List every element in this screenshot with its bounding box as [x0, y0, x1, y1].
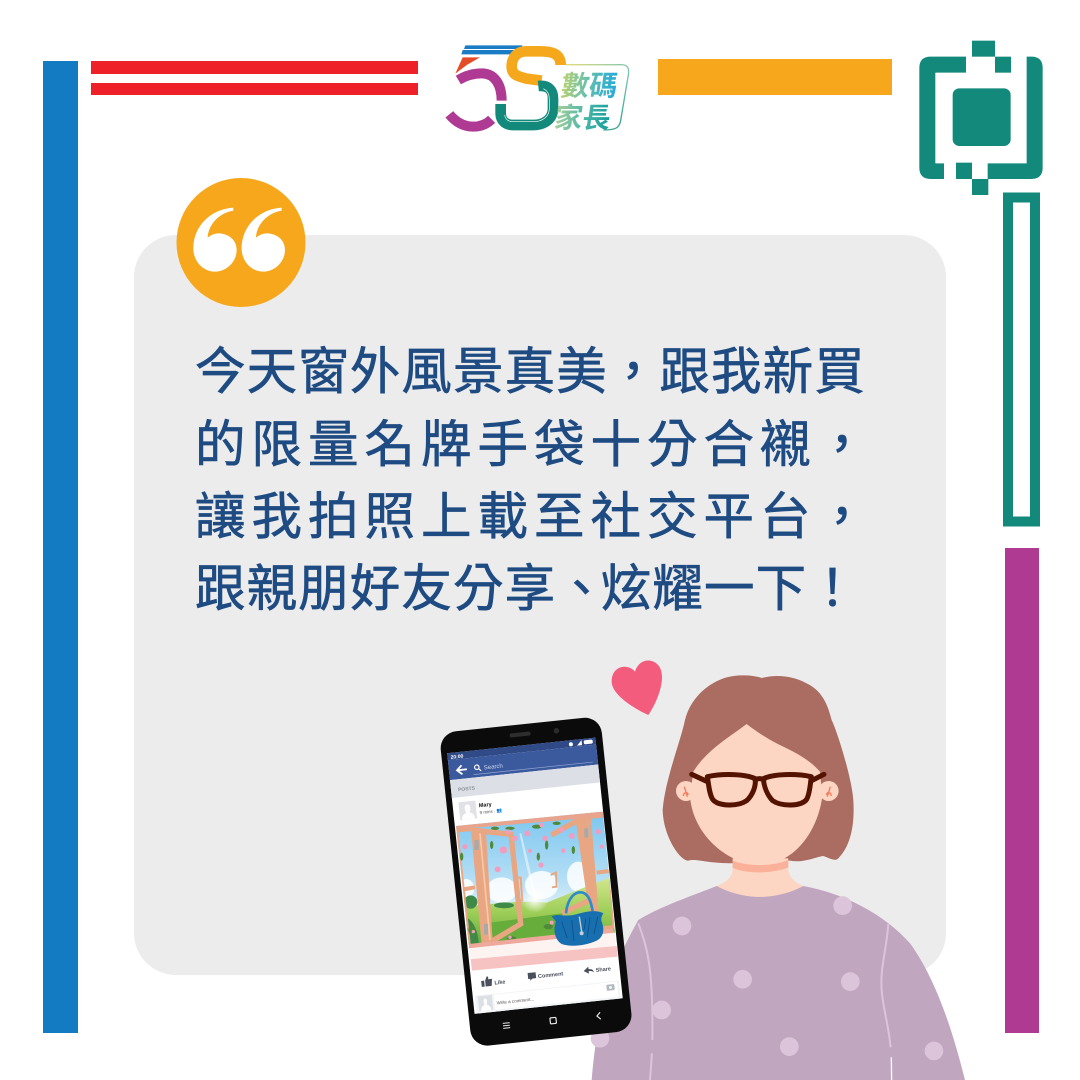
right green outlined bar [1008, 198, 1035, 522]
comment button [528, 969, 564, 981]
share button [583, 964, 611, 975]
logo: 55 digital parents: 家長 [552, 102, 613, 133]
tree line [464, 895, 514, 948]
bag clasp [579, 917, 582, 932]
quote text: 的限量名牌手袋十分合襯， [195, 416, 873, 473]
hills [464, 878, 615, 948]
nav menu [503, 1023, 510, 1028]
sleeve seams [638, 923, 891, 1080]
ears [676, 781, 839, 801]
comment box [475, 981, 621, 1014]
sweater [592, 886, 965, 1080]
neck shadow [733, 860, 788, 872]
glasses [692, 774, 824, 805]
handbag [552, 892, 603, 946]
quote text [195, 343, 873, 617]
status time: 20:00 [450, 754, 464, 761]
ear marks [683, 787, 831, 797]
sleeve gap [889, 1057, 894, 1080]
nav home [550, 1017, 556, 1024]
hair [663, 675, 854, 863]
logo: 55 digital parents [449, 45, 629, 133]
person: woman with glasses [591, 675, 965, 1080]
right post [580, 818, 596, 912]
icon: orange quote badge [176, 178, 306, 307]
top lintel [456, 811, 603, 829]
share button: Share [595, 966, 611, 974]
left blue bar [43, 61, 78, 1033]
right fixed window [589, 815, 614, 928]
left fixed window [457, 829, 483, 947]
quote text: 讓我拍照上載至社交平台， [195, 488, 873, 545]
top red double bars [91, 61, 418, 95]
comment input [494, 982, 619, 1010]
light ray [519, 833, 531, 876]
quote text: 跟親朋好友分享、炫耀一下！ [195, 560, 859, 617]
right open sash [551, 820, 590, 913]
sweater dots [591, 896, 943, 1060]
like button: Like [494, 979, 506, 987]
blossoms [462, 823, 604, 939]
clouds [458, 862, 590, 903]
phone [439, 716, 633, 1047]
search icon [474, 765, 481, 771]
window sill top [467, 928, 614, 949]
icon: pink heart [612, 661, 662, 715]
post name: Mary [479, 802, 493, 809]
quote text: 今天窗外風景真美，跟我新買 [195, 343, 866, 400]
pink ledge [471, 946, 618, 971]
photo: window scene with handbag [453, 810, 620, 971]
search underline [474, 762, 593, 775]
foreground meadow [492, 914, 563, 938]
bag body [552, 911, 603, 946]
left open sash [483, 831, 521, 942]
status icons [569, 739, 593, 746]
search label: Search [484, 764, 503, 771]
phone body [439, 716, 633, 1047]
top orange bar [658, 59, 892, 95]
neck [716, 858, 805, 903]
posts strip [450, 765, 600, 798]
icon: green pixel bracket [919, 41, 1043, 195]
camera [553, 728, 559, 734]
panel: grey quote card [134, 235, 946, 975]
like button [481, 974, 506, 988]
comment button: Comment [538, 971, 564, 980]
avatar [458, 801, 477, 820]
leaves [460, 822, 575, 940]
photo window view [453, 810, 620, 953]
search bar [448, 745, 598, 780]
camera icon [606, 984, 615, 991]
post time: 9 mins · 👥 [479, 808, 503, 815]
bag folds [562, 917, 598, 941]
speaker [509, 731, 531, 738]
face [690, 724, 822, 865]
nav back [597, 1012, 601, 1020]
right purple bar [1005, 548, 1039, 1033]
sill [469, 933, 616, 962]
posts label: POSTS [458, 785, 476, 793]
status bar [447, 738, 596, 760]
comment avatar [478, 995, 493, 1011]
sun burst [522, 891, 548, 912]
logo: 55 digital parents: 數碼 [559, 70, 619, 101]
screen [447, 738, 623, 1014]
comment placeholder: Write a comment... [496, 997, 534, 1005]
back arrow [457, 765, 467, 775]
bag handle [566, 892, 593, 913]
